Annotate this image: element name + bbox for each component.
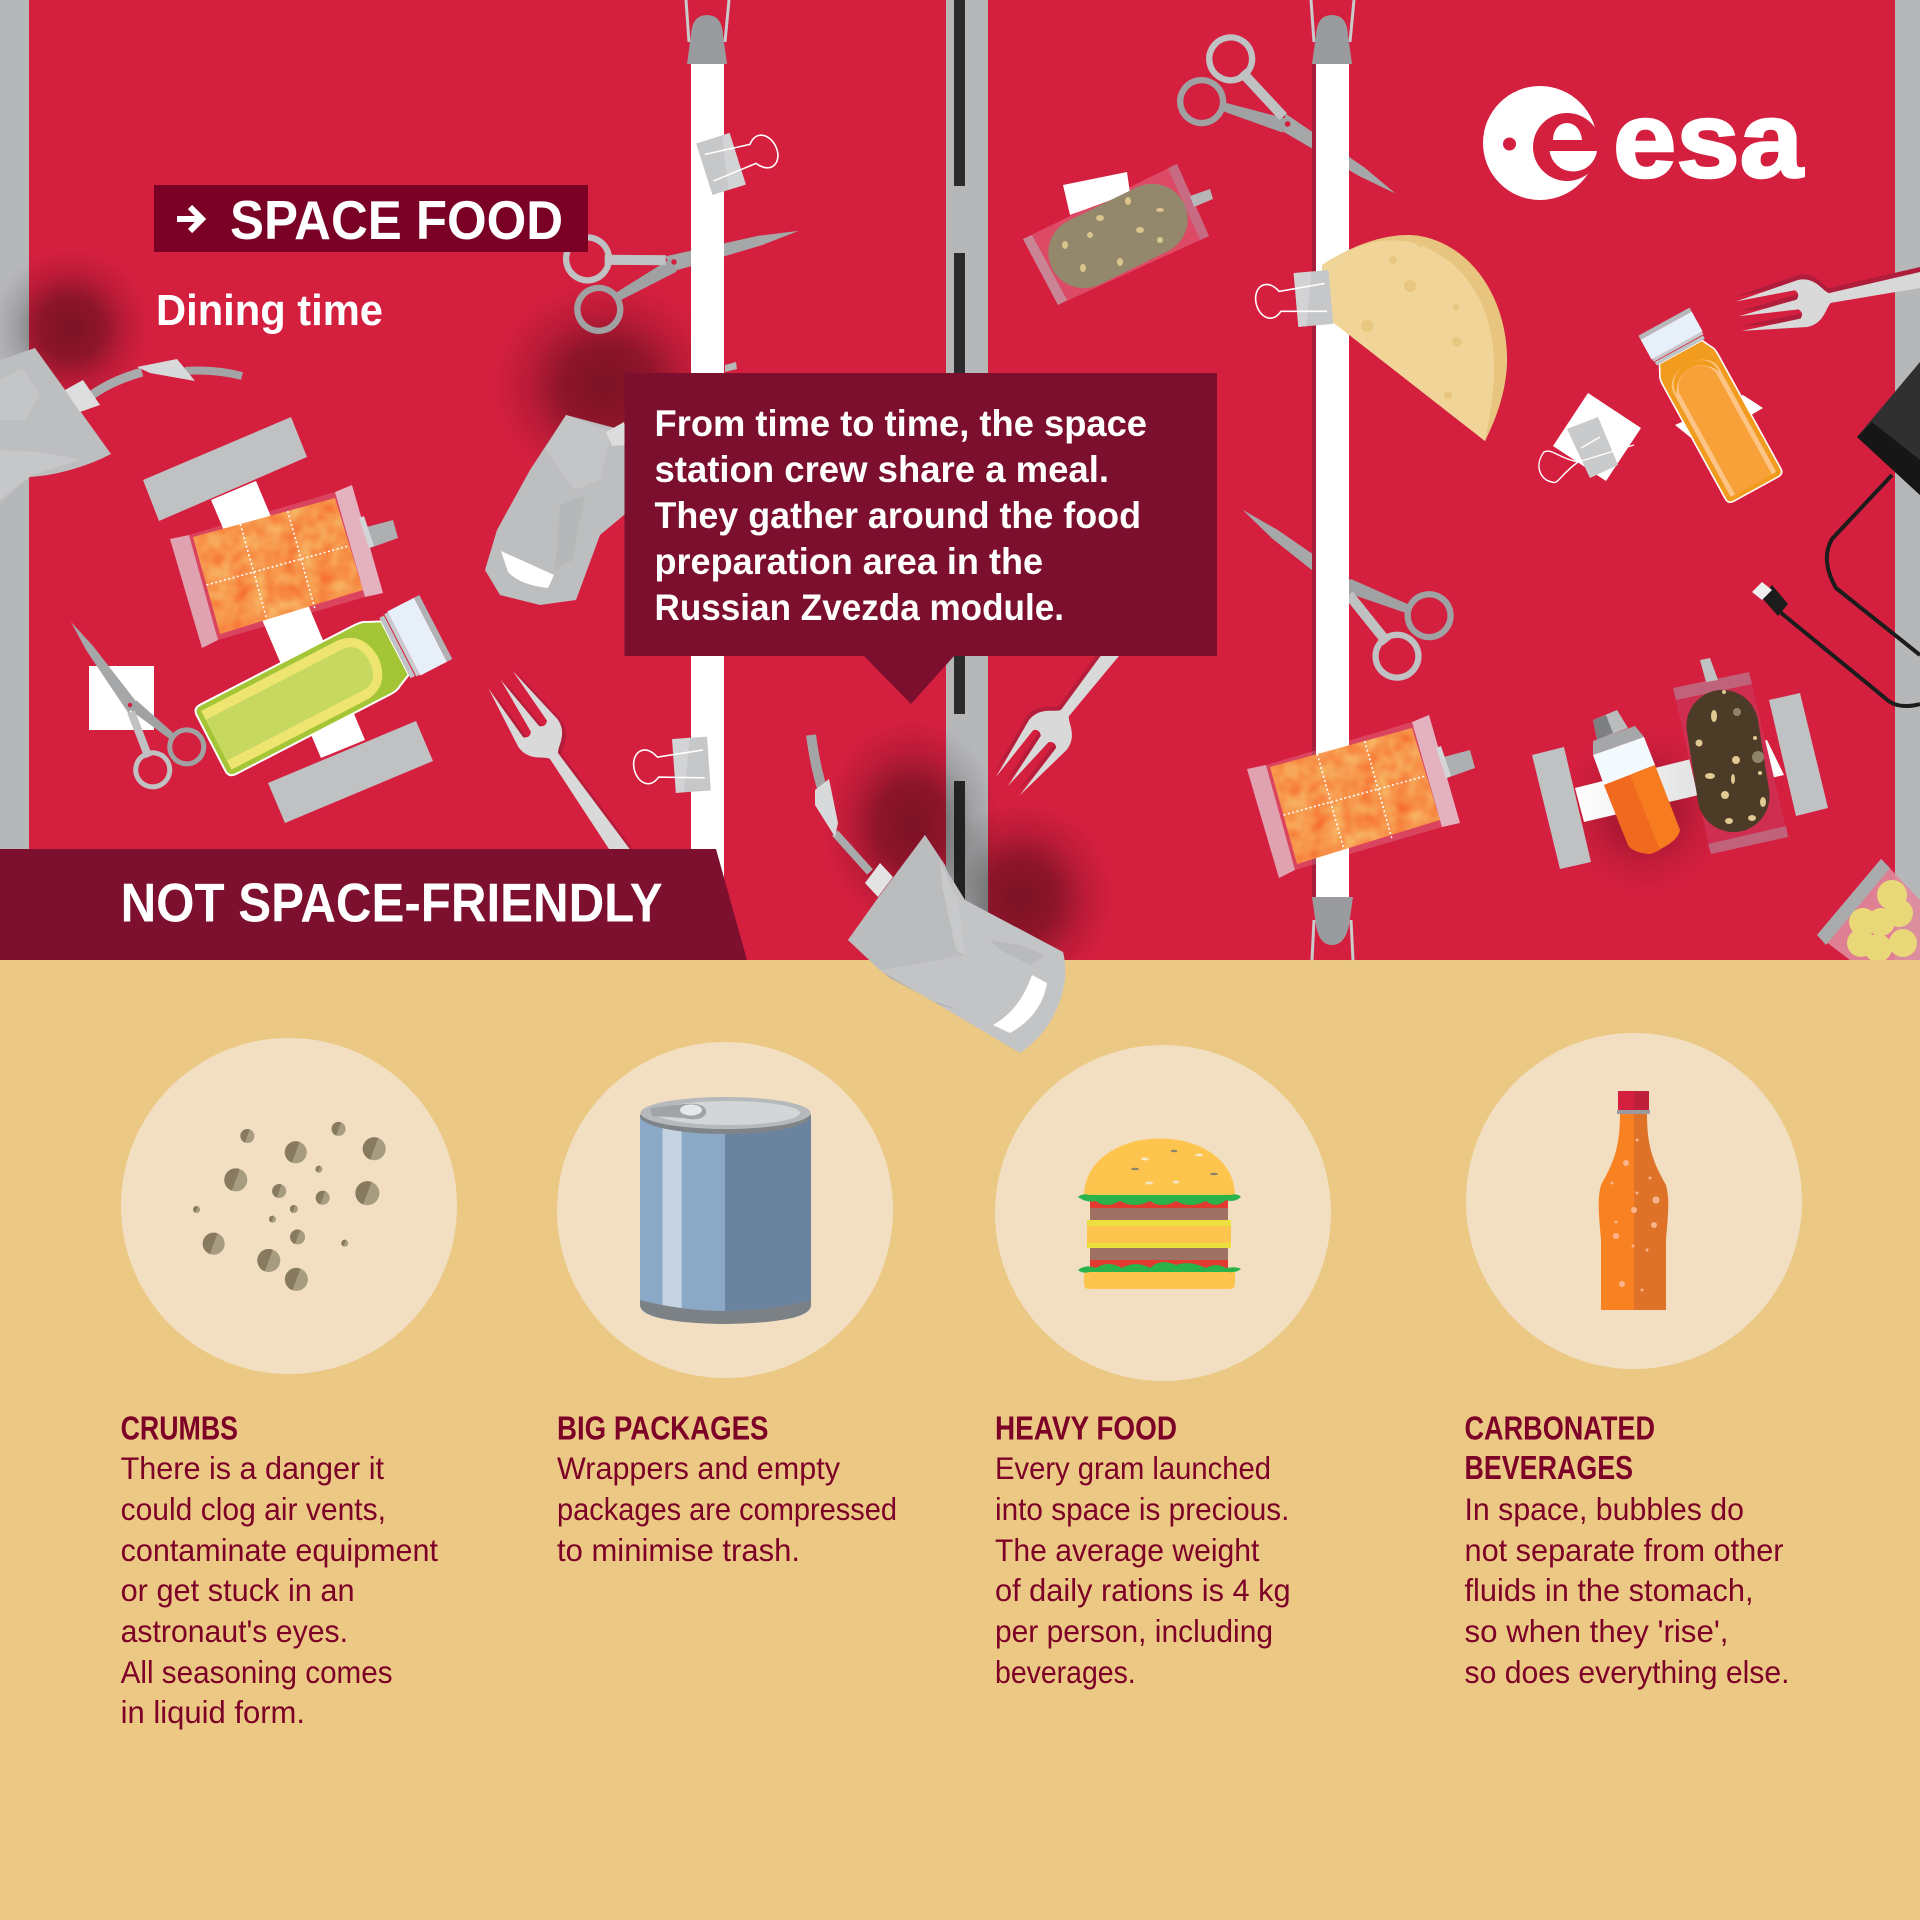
callout: crew shares a meal: They gather around the food [654,495,1141,536]
snack bag: bottom right corner [1817,859,1920,962]
title box: space food: SPACE FOOD [230,189,563,251]
text: carbonated beverages: CARBONATED [1464,1410,1655,1447]
text: crumbs: All seasoning comes [121,1654,393,1690]
drink pouch: left, with nozzle [0,348,242,503]
tea bag clip on white paper [1539,393,1641,483]
tablet device, right edge [1857,362,1920,495]
tray: left strap [211,481,365,758]
text: crumbs: in liquid form. [121,1694,305,1730]
green juice bottle [193,592,454,778]
drink pouch: upper middle, behind callout [485,415,630,605]
tray: left top bar [143,417,307,521]
icon: scissors top middle [560,187,811,335]
tray: right bar left [1532,747,1591,869]
grey rail: centre with black slots [946,0,988,960]
icon: fork upper right [1734,244,1920,340]
icon: burger [1078,1138,1241,1289]
callout: crew shares a meal: station crew share a meal. [654,449,1109,490]
orange juice bottle [1636,306,1784,504]
orange tube [1593,710,1680,854]
text: carbonated beverages: so when they 'rise', [1464,1613,1728,1649]
text: carbonated beverages [1464,1410,1790,1690]
food pack: orange crackers right [1247,715,1475,878]
icon: fork lower left [481,666,652,877]
subtitle: dining time: Dining time [156,286,383,335]
panel: carbonated beverages [1464,1033,1802,1690]
circle: crumbs [121,1038,457,1374]
text: carbonated beverages: BEVERAGES [1464,1449,1633,1486]
text: crumbs: could clog air vents, [121,1491,386,1527]
food pack: orange crackers left [170,485,398,648]
panel: crumbs [121,1038,457,1730]
text: crumbs: CRUMBS [121,1410,238,1447]
tortilla with clip [1254,235,1507,441]
logo: esa [1483,79,1804,200]
logo: esa: esa [1613,79,1804,200]
banner: not space-friendly: NOT SPACE-FRIENDLY [121,872,663,934]
cable from tablet [1827,475,1920,655]
text: heavy food: of daily rations is 4 kg [995,1572,1291,1608]
text: carbonated beverages: fluids in the stomach, [1464,1572,1754,1608]
white paper square [89,666,154,730]
text: crumbs: There is a danger it [121,1450,384,1486]
text: big packages: packages are compressed [557,1491,897,1527]
icon: binder clip top [696,121,784,195]
USB cable [1752,582,1920,706]
text: carbonated beverages: In space, bubbles do [1464,1491,1744,1527]
callout: crew shares a meal [624,373,1217,704]
circle: carbonated beverages [1466,1033,1802,1369]
soft shadows beneath floating bags [0,250,1726,993]
text: heavy food [995,1410,1291,1690]
text: big packages: to minimise trash. [557,1532,800,1568]
text: heavy food: per person, including [995,1613,1273,1649]
icon: scissors top right [1172,29,1420,235]
grey rail: left [0,0,29,849]
text: crumbs: contaminate equipment [121,1532,438,1568]
icon: fork under callout [987,592,1164,801]
circle: heavy food [995,1045,1331,1381]
callout: crew shares a meal: preparation area in the [654,541,1043,582]
callout: crew shares a meal: From time to time, the space [654,403,1147,444]
text: carbonated beverages: not separate from other [1464,1532,1784,1568]
panel: big packages [557,1042,897,1568]
text: heavy food: beverages. [995,1654,1136,1690]
icon: soda bottle [1599,1091,1668,1310]
text: heavy food: The average weight [995,1532,1260,1568]
callout: crew shares a meal: Russian Zvezda module. [654,587,1064,628]
text: carbonated beverages: so does everything else. [1464,1654,1790,1690]
icon: tin can [640,1097,811,1324]
background: tan lower panel [0,960,1920,1920]
text: crumbs: astronaut's eyes. [121,1613,348,1649]
tray: left bottom bar [268,721,433,823]
banner: not space-friendly [0,849,747,960]
white strap left with clips [686,0,737,894]
white paper behind orange bottle [1675,395,1763,445]
drink pouch: centre, overlapping the tan panel [811,735,1065,1053]
text: big packages [557,1410,897,1568]
text: heavy food: Every gram launched [995,1450,1271,1486]
text: heavy food: into space is precious. [995,1491,1289,1527]
icon: scissors lower left [42,599,210,794]
icon: crumbs [193,1122,386,1291]
icon: scissors mid right [1215,470,1459,687]
text: crumbs: or get stuck in an [121,1572,355,1608]
circle: big packages [557,1042,893,1378]
grey rail: right [1895,0,1920,960]
background: red upper panel [0,0,1920,960]
text: crumbs [121,1410,438,1730]
text: heavy food: HEAVY FOOD [995,1410,1177,1447]
panel: heavy food [995,1045,1331,1690]
text: big packages: Wrappers and empty [557,1450,840,1486]
tray: right bar right [1769,693,1828,816]
tray: right strap [1575,740,1784,822]
text: big packages: BIG PACKAGES [557,1410,768,1447]
food pack: dark bar right [1673,658,1788,854]
icon: binder clip lower [632,737,711,796]
white strap right with clips [1311,0,1354,960]
food pack: brown bar top [1023,164,1213,305]
